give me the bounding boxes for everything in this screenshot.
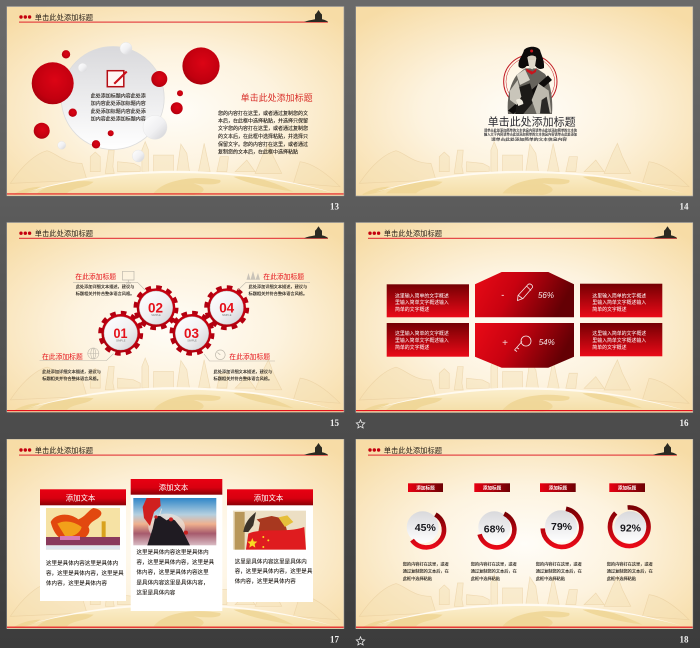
text box: bottom right: 简单的文字概述	[592, 344, 627, 351]
card: left: 容，这里是具体内容，这里是具	[46, 569, 124, 577]
page number 17: 17	[330, 634, 340, 644]
subtitle text: 请单击此处添加简单的文本信息内容请单击此处添加简单的文本信	[484, 128, 578, 132]
image: flag and gate	[233, 511, 306, 550]
slide heading: 单击此处添加标题	[35, 229, 94, 238]
metric: 45%: 您的内容打在这里，或者	[403, 560, 449, 567]
slide heading	[368, 443, 677, 456]
disc text	[91, 92, 146, 122]
slide heading	[19, 443, 328, 456]
panel: slide 14 portrait title	[356, 6, 693, 196]
metric: 92%: 通过复制您的文本后，在	[607, 568, 653, 574]
callout: step 02: 此处添加详细文本描述，建议与	[76, 283, 134, 290]
card: middle: 这里是具体内容这里是具体内	[136, 548, 209, 556]
metric: 92%	[607, 483, 653, 582]
card: middle: 添加文本	[159, 483, 189, 492]
metric: 92%: 您的内容打在这里，或者	[607, 560, 653, 567]
metric: 45%: 此框中选择粘贴	[403, 575, 432, 582]
icon: clock	[216, 350, 225, 360]
gear 01: SIMPLE	[116, 338, 126, 342]
side paragraph: 复制您的文本后，在此框中选择粘贴	[218, 148, 298, 156]
card: right: 容，这里是具体内容，这里是具	[235, 567, 313, 575]
text box: top left: 里输入简单文字概述输入	[395, 299, 449, 306]
text box: top left: 简单的文字概述	[395, 306, 429, 313]
card: right: 体内容，这里是具体内容	[235, 577, 296, 585]
slide heading: 单击此处添加标题	[35, 446, 94, 455]
gear 03: SIMPLE	[187, 338, 197, 342]
metric: 68%: 添加标题	[483, 484, 502, 492]
text box: bottom left: 简单的文字概述	[395, 344, 429, 351]
card: left: 添加文本	[66, 493, 96, 502]
page number 16: 16	[680, 418, 689, 428]
card: right	[227, 489, 313, 602]
metric: 79%: 79%	[551, 521, 573, 533]
image: soldiers with flag	[133, 498, 216, 545]
slide heading: 单击此处添加标题	[384, 446, 443, 455]
side heading: 单击此处添加标题	[241, 92, 313, 103]
metric: 68%: 您的内容打在这里，或者	[471, 560, 517, 567]
metric: 68%: 68%	[484, 524, 505, 536]
icon: star marker row 3	[356, 637, 365, 645]
central block: plus 54%	[475, 323, 574, 368]
icon: globe	[88, 348, 99, 359]
callout: step 01	[40, 348, 114, 382]
gear 04: SIMPLE	[222, 313, 232, 317]
gear 04: 04	[219, 300, 234, 316]
callout: step 02: 标题相关并符合整体语言风格。	[76, 290, 134, 297]
metric: 45%: 45%	[415, 522, 436, 534]
slide heading	[368, 226, 677, 239]
callout: step 02	[73, 271, 145, 297]
metric: 68%	[471, 483, 517, 582]
disc text: 加内容此处添加标题内容	[91, 116, 146, 122]
disc text: 此处添加标题内容此处添	[91, 92, 146, 100]
text box: bottom right: 这里输入简单的文字概述	[592, 330, 646, 337]
metric: 92%: 添加标题	[618, 484, 637, 492]
text box: bottom left: 这里输入简单的文字概述	[395, 330, 449, 337]
callout: step 04: 此处添加详细文本描述，建议与	[248, 283, 307, 290]
icon: people bars	[246, 271, 260, 280]
callout: step 01: 在此添加标题	[42, 352, 83, 361]
callout: step 01: 此处添加详细文本描述，建议与	[42, 368, 101, 375]
text box: bottom right	[580, 323, 662, 356]
metric: 45%: 通过复制您的文本后，在	[403, 568, 449, 574]
metric: 68%: 此框中选择粘贴	[471, 575, 500, 582]
gear 02: SIMPLE	[151, 313, 161, 317]
metric: 92%: 此框中选择粘贴	[607, 575, 636, 582]
slide heading: 单击此处添加标题	[35, 13, 94, 22]
card: right: 添加文本	[254, 493, 284, 502]
panel: slide 18 percentage rings	[356, 439, 693, 629]
central block: minus 56%	[475, 272, 574, 317]
side paragraph: 您的内容打在这里，或者通过复制您的文	[218, 110, 308, 117]
card: left: 体内容，这里是具体内容	[46, 579, 108, 587]
metric: 68%: 通过复制您的文本后，在	[471, 568, 517, 574]
side paragraph: 文字您的内容打在这里，或者通过复制您	[218, 125, 308, 132]
card: middle: 容，这里是具体内容，这里是具	[136, 558, 215, 566]
callout: step 01: 标题相关并符合整体语言风格。	[42, 375, 101, 382]
gear 01	[100, 313, 141, 354]
callout: step 02: 在此添加标题	[75, 272, 116, 281]
card: left	[40, 489, 126, 601]
central block: plus 54%: 54%	[539, 338, 555, 347]
metric: 45%: 添加标题	[416, 484, 435, 492]
central block: minus 56%: 56%	[538, 291, 554, 300]
text box: top right: 简单的文字概述	[592, 306, 627, 313]
text box: bottom right: 里输入简单文字概述输入	[592, 337, 646, 344]
callout: step 03: 此处添加详细文本描述，建议与	[214, 368, 272, 375]
page number 18: 18	[680, 634, 689, 644]
image: china map	[46, 508, 120, 550]
page number 15: 15	[330, 418, 340, 428]
text box: top left	[387, 284, 469, 317]
red bubbles	[32, 47, 220, 148]
gear 02: 02	[148, 300, 163, 316]
page number 13: 13	[330, 202, 340, 212]
text box: bottom left: 里输入简单文字概述输入	[395, 337, 449, 344]
card: middle: 体内容，这里是具体内容这里	[136, 568, 209, 576]
slide heading	[19, 226, 328, 239]
text box: bottom left	[387, 323, 469, 357]
callout: step 03: 在此添加标题	[229, 352, 270, 361]
text box: top left: 这里输入简单的文字概述	[395, 292, 449, 299]
page number 14: 14	[680, 202, 689, 212]
metric: 45%	[403, 483, 449, 582]
gear 01: 01	[114, 325, 128, 341]
card: middle: 这里是具体内容	[136, 588, 176, 596]
subtitle text: 输入文字内容请单击此处添加简单的文本信息内容请单击此处添加	[484, 132, 578, 136]
callout: step 03: 标题相关并符合整体语言风格。	[214, 375, 272, 382]
slide heading: 单击此处添加标题	[384, 229, 443, 238]
metric: 79%	[536, 483, 582, 582]
gear 03	[172, 313, 212, 354]
panel: slide 17 three cards	[7, 439, 344, 629]
callout: step 04	[238, 271, 310, 297]
slide heading	[19, 10, 328, 23]
panel: slide 16 red blocks	[356, 222, 693, 413]
callout: step 04: 标题相关并符合整体语言风格。	[248, 290, 307, 297]
card: left: 这里是具体内容这里是具体内	[46, 559, 118, 567]
disc text: 此处添加标题内容此处添	[91, 108, 146, 115]
metric: 79%: 通过复制您的文本后，在	[536, 568, 582, 574]
white bubbles	[58, 42, 167, 162]
panel: slide 15 gears	[7, 222, 344, 412]
subtitle text	[484, 128, 578, 142]
text box: top right: 这里输入简单的文字概述	[592, 292, 646, 299]
card: middle: 是具体内容这里是具体内容，	[136, 578, 209, 586]
card: middle	[131, 479, 222, 611]
icon: soldier portrait	[504, 47, 557, 114]
side paragraph	[218, 110, 308, 156]
icon: star marker row 2	[356, 420, 365, 428]
side paragraph: 本后，在此框中选择粘贴，并选择只保留	[218, 118, 308, 125]
card: right: 这里是具体内容这里是具体内	[235, 558, 307, 566]
central block: minus 56%: -	[501, 290, 504, 300]
callout: step 04: 在此添加标题	[263, 272, 304, 281]
icon: pencil	[518, 284, 533, 300]
metric: 79%: 此框中选择粘贴	[536, 575, 565, 582]
panel: slide 13 red bubbles	[7, 6, 344, 196]
callout: step 03	[204, 350, 275, 382]
gear 02	[136, 287, 176, 328]
metric: 79%: 添加标题	[549, 484, 567, 492]
icon: edit pencil	[107, 71, 128, 87]
subtitle text: 请单击此处添加简单的文本信息内容	[491, 136, 568, 142]
title: 单击此处添加标题	[488, 114, 576, 128]
icon: key	[514, 342, 522, 352]
central white disc	[61, 46, 164, 150]
gear 03: 03	[184, 325, 199, 341]
icon: monitor	[122, 271, 134, 283]
gear 04	[206, 287, 247, 328]
side paragraph: 的文本后，在此框中选择粘贴，并选择只	[218, 133, 308, 140]
central block: plus 54%: +	[502, 338, 508, 349]
disc text: 加内容此处添加标题内容	[91, 100, 146, 107]
metric: 79%: 您的内容打在这里，或者	[536, 560, 582, 567]
side paragraph: 保留文字。您的内容打在这里，或者通过	[218, 141, 308, 148]
text box: top right	[580, 284, 662, 317]
metric: 92%: 92%	[620, 522, 642, 534]
text box: top right: 里输入简单文字概述输入	[592, 299, 646, 306]
